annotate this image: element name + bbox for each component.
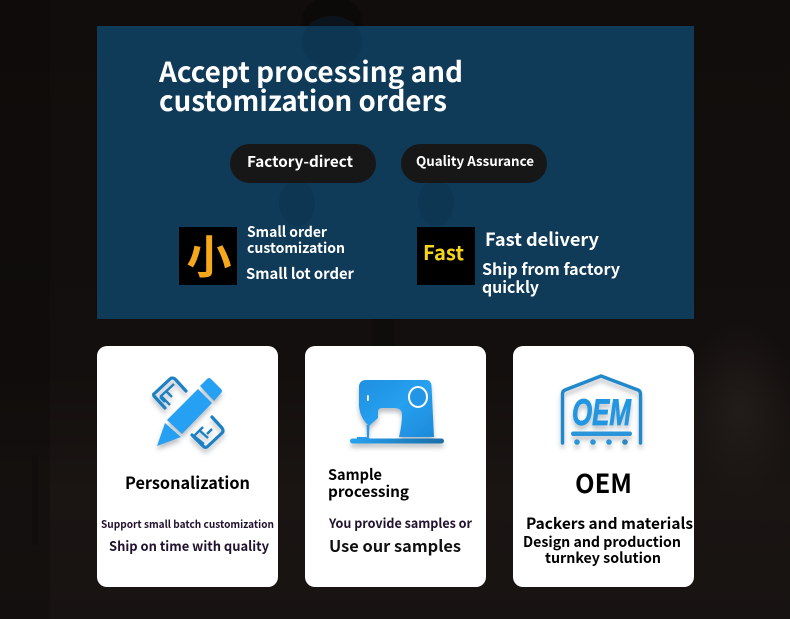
card text: sample processing: Use our samples: [329, 533, 461, 557]
title: [158, 51, 463, 120]
icon: OEM warehouse: [562, 376, 640, 445]
card text: OEM: Design and production: [523, 531, 681, 552]
icon: pencil and ruler: [154, 378, 223, 447]
heading: sample processing: [328, 464, 409, 502]
card: OEM: [513, 346, 694, 587]
card text: OEM: Packers and materials: [526, 512, 693, 534]
badge: factory-direct: Factory-direct: [247, 151, 354, 172]
small order text: Small lot order: [246, 263, 354, 284]
feature: fast delivery: [417, 226, 620, 298]
card text: OEM: [523, 512, 693, 568]
heading: OEM: OEM: [575, 464, 632, 501]
heading: sample processing: Sample: [328, 464, 382, 485]
small order text: [246, 221, 354, 284]
fast delivery text: Ship from factory: [482, 256, 620, 280]
icon: sewing machine: [350, 380, 444, 444]
badge: quality assurance: [401, 144, 547, 183]
badge: factory-direct: [230, 144, 376, 183]
card text: OEM: turnkey solution: [545, 547, 661, 568]
title: customization orders: [159, 80, 447, 120]
fast delivery text: Fast delivery: [485, 226, 600, 252]
card text: sample processing: You provide samples or: [328, 513, 472, 532]
card text: personalization: Support small batch customization: [101, 517, 274, 532]
fast delivery text: quickly: [482, 274, 539, 298]
badge: quality assurance: Quality Assurance: [416, 150, 534, 170]
heading: sample processing: processing: [328, 481, 409, 502]
icon: OEM warehouse: OEM: [572, 392, 632, 433]
feature: small order: [179, 221, 354, 286]
icon: fast: [417, 227, 475, 285]
title: Accept processing and: [158, 51, 463, 91]
card text: sample processing: [328, 513, 472, 557]
card text: personalization: Ship on time with quality: [109, 535, 269, 555]
card text: personalization: [101, 517, 274, 555]
panel: processing and customization: [97, 16, 694, 319]
card: sample processing: [305, 346, 486, 587]
icon: small character: 小: [186, 221, 232, 286]
panel texture: [279, 16, 454, 226]
card: personalization: [97, 346, 278, 587]
fast delivery text: [482, 226, 620, 298]
small order text: customization: [247, 237, 345, 258]
heading: personalization: Personalization: [125, 470, 250, 494]
icon: fast: Fast: [423, 237, 465, 266]
small order text: Small order: [247, 221, 328, 242]
